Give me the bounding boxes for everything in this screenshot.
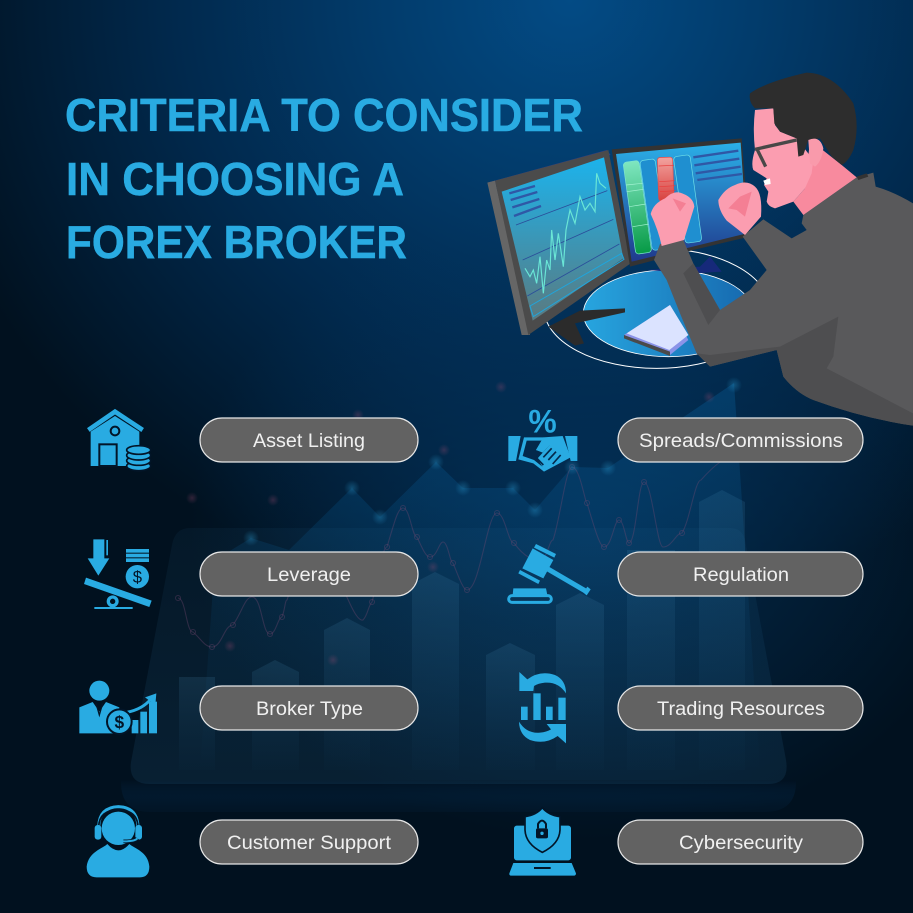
pill: Trading Resources	[618, 686, 863, 730]
man: coat	[654, 173, 913, 426]
pill: Broker Type: Broker Type	[256, 699, 363, 720]
icon: bar chart with refresh arrows	[519, 672, 566, 743]
title: IN CHOOSING A	[66, 153, 404, 205]
row 1: asset listing	[88, 412, 418, 471]
pill: Customer Support	[200, 820, 418, 864]
pill: Regulation: Regulation	[693, 565, 789, 586]
man: face	[752, 108, 813, 208]
monitor stand	[548, 308, 625, 346]
pill: Cybersecurity: Cybersecurity	[679, 833, 804, 854]
icon: handshake with percent: %	[528, 403, 557, 439]
pill: Broker Type	[200, 686, 418, 730]
pill: Leverage: Leverage	[267, 565, 351, 586]
title: FOREX BROKER	[66, 216, 407, 268]
icon: laptop with shield and lock	[509, 808, 576, 876]
man: neck	[793, 140, 857, 215]
right monitor	[612, 138, 749, 267]
collar inner	[857, 173, 868, 180]
pill: Cybersecurity	[618, 820, 863, 864]
icon: handshake with percent	[508, 403, 577, 472]
row 1: spreads	[508, 403, 863, 472]
row 4: cybersecurity	[509, 808, 863, 876]
icon: seesaw with arrow and coin	[84, 539, 152, 609]
notebook	[624, 305, 688, 356]
row 3: broker type	[79, 681, 418, 734]
pill: Regulation	[618, 552, 863, 596]
title: CRITERIA TO CONSIDER	[65, 89, 583, 141]
background chart: area, bars, line and tablet panel	[121, 377, 796, 812]
mouth	[763, 178, 771, 185]
glasses	[755, 140, 797, 167]
title	[65, 89, 583, 268]
icon: house with coins	[88, 412, 151, 471]
icon: gavel	[509, 544, 591, 602]
pill: Spreads/Commissions: Spreads/Commissions	[639, 431, 843, 452]
coat shadow	[683, 263, 913, 426]
ear	[808, 139, 823, 167]
left monitor	[487, 150, 631, 335]
row 4: customer support	[87, 807, 418, 877]
pill: Asset Listing: Asset Listing	[253, 431, 365, 452]
icon: seesaw with arrow and coin: $	[133, 568, 142, 587]
pill: Customer Support: Customer Support	[227, 833, 392, 854]
icon: broker with dollar coin and growth chart	[79, 681, 157, 734]
illustration: trader at two monitors	[487, 73, 913, 426]
row 3: trading resources	[519, 672, 863, 743]
icon: headset agent	[87, 807, 149, 877]
hair	[750, 73, 857, 165]
pill: Leverage	[200, 552, 418, 596]
pill: Asset Listing	[200, 418, 418, 462]
row 2: regulation	[509, 544, 863, 602]
pill: Trading Resources: Trading Resources	[657, 699, 825, 720]
desk rings	[544, 248, 769, 368]
row 2: leverage	[84, 539, 418, 609]
fists	[651, 183, 761, 246]
icon: broker with dollar coin and growth chart: $	[115, 712, 125, 732]
pill: Spreads/Commissions	[618, 418, 863, 462]
